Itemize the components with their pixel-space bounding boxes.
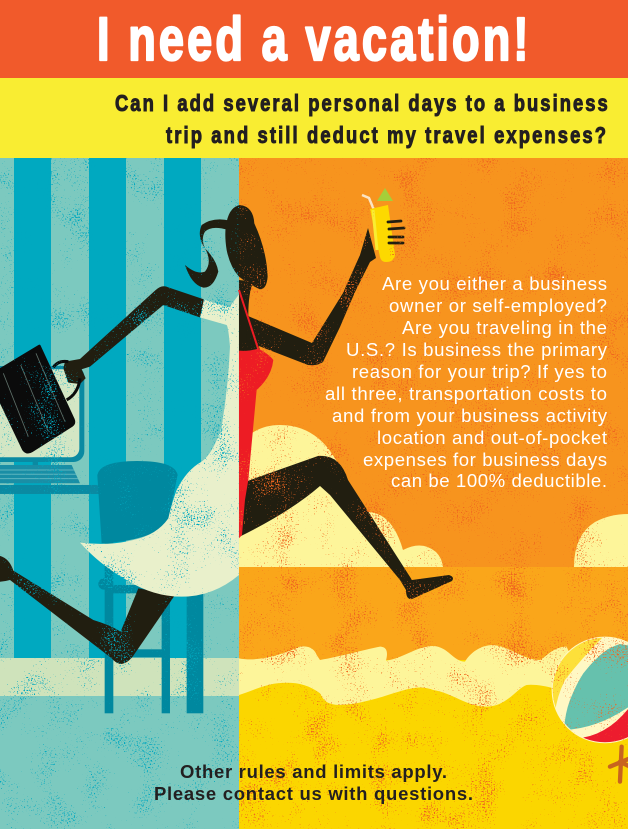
- line 2: owner or self-employed?: [389, 295, 607, 316]
- illustration: beach ball: [552, 636, 628, 744]
- body text: [325, 273, 608, 491]
- torso: [239, 280, 260, 352]
- line 9: expenses for business days: [363, 449, 607, 470]
- question line 1: Can I add several personal days to a business: [115, 91, 608, 117]
- line 8: location and out-of-pocket: [377, 427, 608, 448]
- footer line 1: Other rules and limits apply.: [180, 761, 447, 782]
- title banner: [0, 0, 628, 78]
- footer note: [154, 761, 473, 804]
- footer line 2: Please contact us with questions.: [154, 783, 473, 804]
- line 5: reason for your trip? If yes to: [352, 361, 607, 382]
- icon: chair: [97, 461, 203, 713]
- briefcase: [0, 346, 80, 452]
- red dress: [239, 348, 273, 538]
- illustration: woman: [0, 188, 453, 664]
- question banner: [0, 78, 628, 158]
- icon: starfish: [610, 747, 628, 782]
- line 1: Are you either a business: [382, 273, 607, 294]
- line 7: and from your business activity: [332, 405, 608, 426]
- icon: cocktail glass: [362, 188, 404, 262]
- panel: right beach background: [239, 158, 628, 829]
- title: I need a vacation!: [97, 5, 528, 74]
- line 3: Are you traveling in the: [402, 317, 607, 338]
- texture: right speckles: [239, 158, 628, 829]
- texture: left speckles: [0, 158, 239, 829]
- line 6: all three, transportation costs to: [325, 383, 607, 404]
- illustration: woman cloud behind leg: [239, 425, 443, 567]
- raised arm with briefcase hand: [63, 286, 204, 384]
- illustration: wave: [239, 645, 587, 707]
- illustration: distant sun cloud: [574, 514, 628, 567]
- question line 2: trip and still deduct my travel expenses?: [166, 123, 606, 149]
- front leg: [239, 456, 453, 599]
- red strap: [239, 290, 258, 349]
- back leg: [0, 555, 175, 664]
- icon: computer monitor and desk: [0, 366, 99, 494]
- panel: left office background: [0, 158, 239, 829]
- raised drink arm: [246, 228, 376, 365]
- dress: [80, 294, 239, 597]
- line 10: can be 100% deductible.: [391, 470, 607, 491]
- line 4: U.S.? Is business the primary: [346, 339, 608, 360]
- hair and ponytail: [185, 205, 268, 289]
